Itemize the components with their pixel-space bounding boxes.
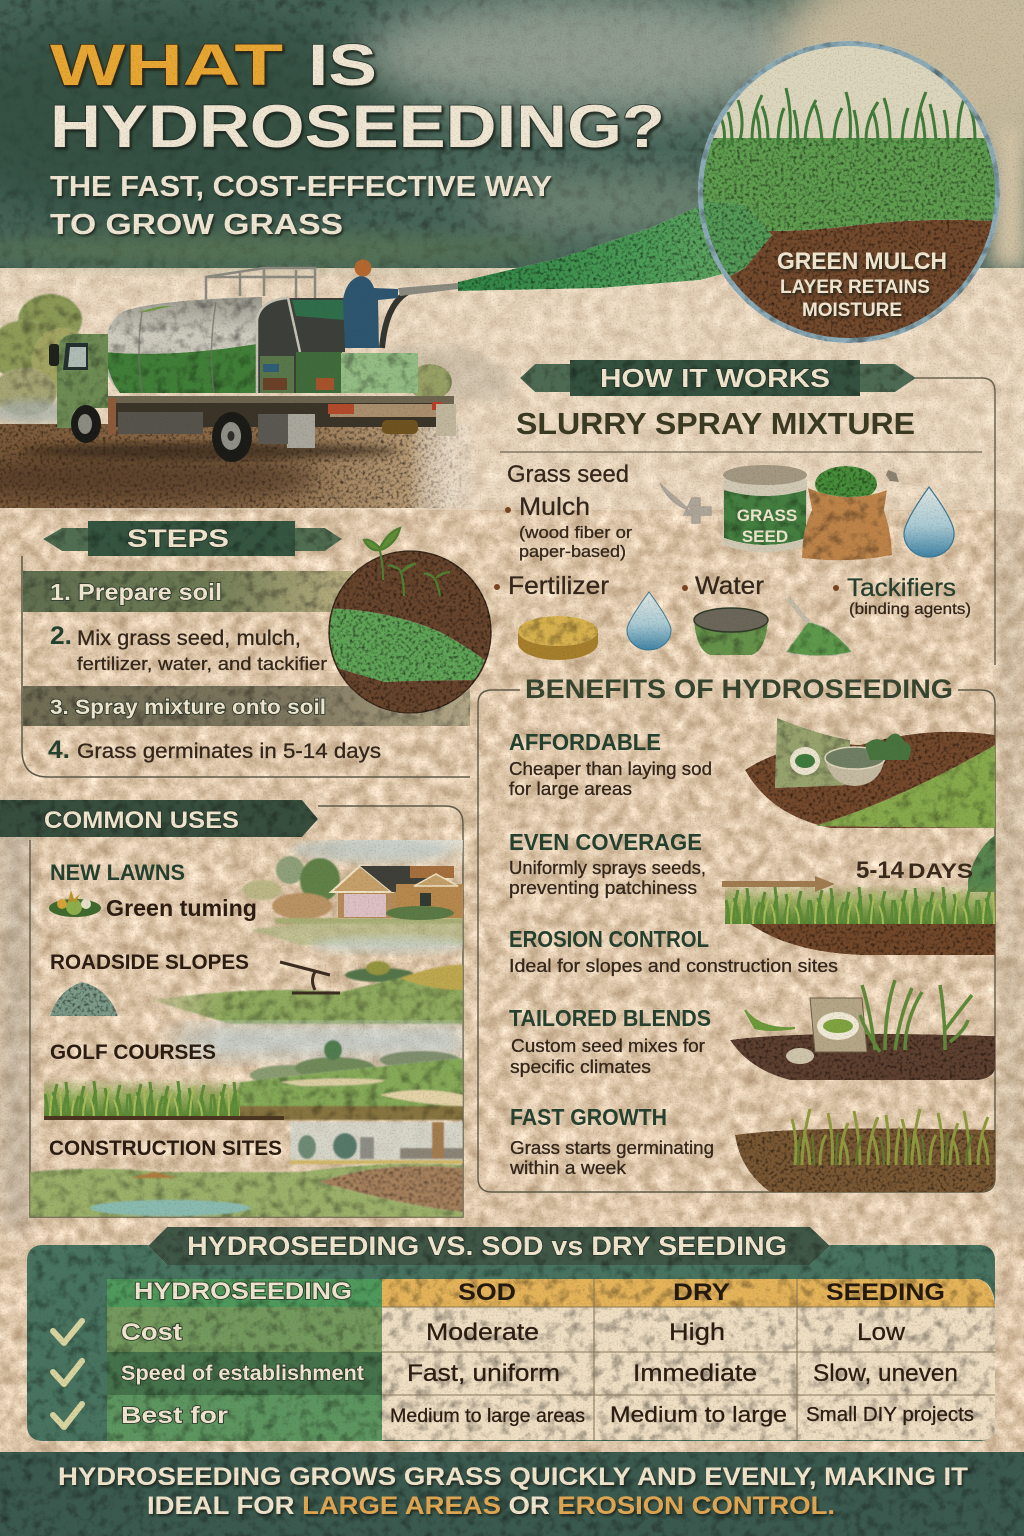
table header: DRY [673,1279,730,1306]
row: best for: Medium to large [610,1402,787,1427]
panel: comparison [27,1245,995,1441]
benefit: fast growth [509,1104,714,1178]
benefit: tailored blends: Custom seed mixes for [511,1036,705,1056]
benefit: erosion control: EROSION CONTROL [509,926,709,952]
common uses labels: NEW LAWNS [50,860,185,885]
benefits heading: BENEFITS OF HYDROSEEDING [525,674,953,704]
subtitle: TO GROW GRASS [50,209,343,241]
divider and ingredient list: Fertilizer [508,572,609,600]
construction foreground [30,1164,463,1217]
steps ribbon: STEPS [127,525,229,553]
front wheel [71,405,101,443]
common uses labels: CONSTRUCTION SITES [49,1137,282,1160]
heading: slurry spray mixture: SLURRY SPRAY MIXTURE [516,406,915,441]
step 4: 4. [48,736,70,764]
benefit: fast growth: within a week [509,1158,627,1178]
subtitle [50,171,552,241]
icon: grass seed can [723,465,807,552]
title: WHAT [50,33,283,98]
benefit: fast growth: FAST GROWTH [510,1104,667,1130]
spray stream [458,197,772,291]
steps ribbon [43,521,342,556]
icon: grass seed can: SEED [742,527,788,546]
header band background [0,0,1024,510]
panel: benefits [478,674,995,1192]
icon: grass seed can: GRASS [737,506,797,525]
row: speed of establishment [121,1360,958,1387]
step 2: Mix grass seed, mulch, [77,627,301,650]
divider and ingredient list: Grass seed [507,461,629,488]
icon: green turning seeds [49,890,101,917]
circle caption: MOISTURE [802,300,902,321]
sprayer machine [280,962,340,993]
common uses ribbon: COMMON USES [44,807,239,834]
common uses scenes [30,840,463,1217]
icon: tackifier scoop [786,598,852,656]
open compartment [257,298,345,393]
step 3: 3. Spray mixture onto soil [50,696,326,719]
panel: how it works outline [915,378,995,665]
title: IS [308,33,377,98]
circle caption: GREEN MULCH [777,248,947,275]
benefit: affordable: AFFORDABLE [509,729,661,755]
comparison ribbon: HYDROSEEDING VS. SOD vs DRY SEEDING [187,1231,787,1261]
scene: construction sites [290,1122,463,1164]
icon: green bowl [694,608,768,655]
row: best for: Best for [121,1402,228,1428]
scene: golf courses [170,1025,463,1120]
icon: burlap sack with seed [802,466,892,560]
roof rack [206,268,315,303]
tank body [104,297,262,393]
benefit: affordable [509,729,712,799]
icon: small seed [886,470,899,482]
image: affordable soil and sack [745,718,995,828]
row: best for [121,1402,974,1428]
row: best for: Medium to large areas [390,1406,585,1427]
divider and ingredient list: (wood fiber or [519,523,632,542]
chassis deck [108,396,454,404]
panel: steps [22,521,470,777]
label: 5-14 days: DAYS [908,860,973,883]
rear wheel [212,412,252,462]
benefit: fast growth: Grass starts germinating [510,1138,714,1158]
benefit: even coverage: preventing patchiness [509,878,697,898]
step rows bands [23,571,353,612]
benefit: even coverage [509,829,706,898]
row: cost: Moderate [426,1319,539,1346]
step 2: 2. [50,622,72,650]
label: 5-14 days: 5-14 [856,857,905,884]
benefit: tailored blends: TAILORED BLENDS [509,1005,711,1031]
common uses labels: GOLF COURSES [50,1041,216,1064]
common uses ribbon [0,800,318,837]
cab [49,334,108,428]
comparison ribbon [148,1227,830,1265]
label: 5-14 days [856,857,973,884]
icon: water drop large [904,487,954,557]
benefit: erosion control [509,926,838,976]
step 2: fertilizer, water, and tackifier [77,654,327,674]
common uses labels [49,860,282,1160]
row: cost [121,1319,906,1346]
truck ground and bush scene [0,294,510,508]
circle: soil and grass cutaway [325,551,495,713]
row: speed of establishment: Speed of establishment [121,1362,364,1385]
benefit: even coverage: Uniformly sprays seeds, [509,858,706,878]
row: speed of establishment: Slow, uneven [813,1360,958,1387]
icon: rock mound [50,982,118,1016]
comparison table [107,1278,995,1441]
footer text: IDEAL FOR LARGE AREAS OR EROSION CONTROL. [147,1492,835,1520]
image: even coverage grass [725,835,995,955]
benefit: erosion control: Ideal for slopes and construction sites [509,956,838,976]
benefit: affordable: for large areas [509,779,632,799]
icon: plus sign [660,483,711,523]
icon: seedlings [364,528,450,596]
table header [134,1278,945,1306]
common uses labels: ROADSIDE SLOPES [50,951,249,974]
table header: SEEDING [826,1279,945,1306]
footer banner [0,1452,1024,1536]
how it works ribbon [520,360,916,396]
scene: roadside slopes [150,937,470,1024]
row: cost: High [669,1319,725,1346]
subtitle: THE FAST, COST-EFFECTIVE WAY [50,171,552,203]
common uses labels: Green tuming [106,895,257,921]
image: fast growth [735,1105,995,1192]
circle caption: LAYER RETAINS [780,277,930,298]
divider and ingredient list: Mulch [519,493,590,521]
icon: fertilizer disc [518,616,598,660]
footer text [58,1463,968,1520]
row: cost: Low [857,1319,906,1346]
panel: common uses [30,806,490,1217]
title: HYDROSEEDING? [50,93,665,160]
row: speed of establishment: Fast, uniform [407,1360,560,1387]
circle: green mulch closeup [690,40,1010,345]
image: tailored blends [730,980,995,1080]
worker spraying [343,260,458,348]
arrow: to 5-14 days [722,876,835,892]
divider and ingredient list: Tackifiers [847,574,956,602]
row: cost: Cost [121,1319,182,1346]
benefit: tailored blends [509,1005,711,1077]
divider and ingredient list: (binding agents) [849,601,971,618]
row: speed of establishment: Immediate [633,1360,757,1387]
check marks [53,1321,82,1427]
hydroseeding truck illustration [49,260,458,462]
title [50,33,665,160]
benefit: affordable: Cheaper than laying sod [509,759,712,779]
how it works ribbon: HOW IT WORKS [600,363,830,393]
step 4: Grass germinates in 5-14 days [77,740,381,763]
table header: SOD [458,1279,516,1306]
divider and ingredient list: paper-based) [519,542,626,561]
step 1: 1. Prepare soil [50,579,222,605]
icon: water drop small [627,592,671,650]
divider and ingredient list [494,452,982,618]
step 2 [50,622,327,674]
benefit: even coverage: EVEN COVERAGE [509,829,702,855]
house [331,866,463,920]
table header: HYDROSEEDING [134,1278,352,1305]
circle caption [777,248,947,321]
footer text: HYDROSEEDING GROWS GRASS QUICKLY AND EVENLY, MAKING IT [58,1463,968,1491]
benefit: tailored blends: specific climates [510,1057,651,1077]
foreground grass tuft [44,1078,284,1120]
divider and ingredient list: Water [695,572,764,600]
row: best for: Small DIY projects [806,1404,974,1426]
equipment boxes [260,356,294,393]
scene: new lawns [242,840,463,946]
